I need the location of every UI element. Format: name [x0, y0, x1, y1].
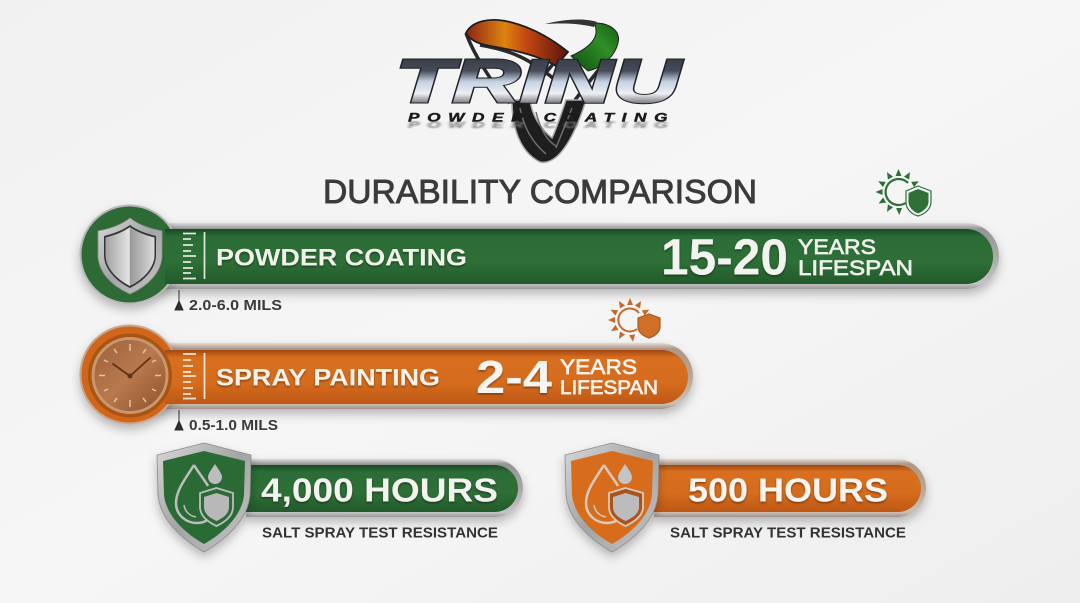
pill fill	[654, 465, 921, 512]
thickness note: powder coating: 2.0-6.0 MILS	[189, 297, 282, 314]
icon: drops and shield	[586, 464, 643, 526]
panel: spray painting salt spray	[565, 443, 926, 552]
logo tagline: POWDER COATING	[408, 112, 668, 125]
bar fill	[130, 350, 688, 404]
medallion	[80, 206, 178, 304]
panel: powder coating salt spray	[157, 443, 523, 552]
lifespan unit: lifespan: LIFESPAN	[560, 377, 658, 399]
icon: sun and shield, green	[876, 169, 931, 216]
lifespan unit: years: YEARS	[560, 356, 637, 379]
logo swoosh: green band	[571, 23, 618, 71]
pill fill	[246, 465, 518, 512]
thickness note: powder coating	[175, 290, 282, 314]
logo tagline shadow: POWDER COATING	[408, 119, 668, 130]
logo swoosh: black lower loop	[512, 100, 586, 162]
shield badge	[565, 443, 659, 552]
logo swoosh: red band	[466, 20, 568, 66]
pill value: 4,000 HOURS	[261, 472, 498, 508]
logo loop texture	[520, 108, 572, 154]
lifespan unit: lifespan: LIFESPAN	[798, 256, 913, 280]
pill value: 500 HOURS	[688, 472, 888, 508]
pill caption: SALT SPRAY TEST RESISTANCE	[262, 524, 498, 542]
logo swoosh: dark top sliver	[545, 20, 597, 27]
pill caption: SALT SPRAY TEST RESISTANCE	[670, 524, 906, 542]
panel: powder coating bar	[80, 206, 999, 304]
lifespan unit: years: YEARS	[798, 235, 876, 259]
icon: silver shield	[98, 218, 162, 294]
lifespan value: 15-20	[661, 228, 788, 286]
logo wordmark: TRINU	[396, 48, 683, 115]
pill frame	[654, 459, 926, 517]
bar label: POWDER COATING	[216, 244, 467, 272]
thickness note: spray painting: 0.5-1.0 MILS	[189, 417, 278, 434]
icon: sun and shield, orange	[608, 298, 660, 342]
logo wordmark outline: TRINU	[396, 48, 683, 115]
logo: Trinu Powder Coating	[396, 20, 683, 162]
icon: drops and shield	[176, 464, 233, 526]
pill frame	[246, 459, 523, 517]
ruler ticks	[183, 353, 204, 399]
thickness note: spray painting	[175, 410, 278, 434]
ruler ticks	[183, 232, 204, 279]
logo ring behind wordmark	[466, 33, 600, 105]
icon: copper clock	[88, 334, 172, 418]
bar label: SPRAY PAINTING	[216, 364, 440, 392]
bar frame	[130, 343, 693, 409]
bar frame	[130, 223, 999, 289]
shield badge	[157, 443, 251, 552]
bar fill	[130, 229, 993, 284]
panel: spray painting bar	[80, 326, 693, 424]
lifespan value: 2-4	[476, 351, 552, 403]
title: DURABILITY COMPARISON	[323, 174, 757, 211]
medallion	[80, 326, 178, 424]
